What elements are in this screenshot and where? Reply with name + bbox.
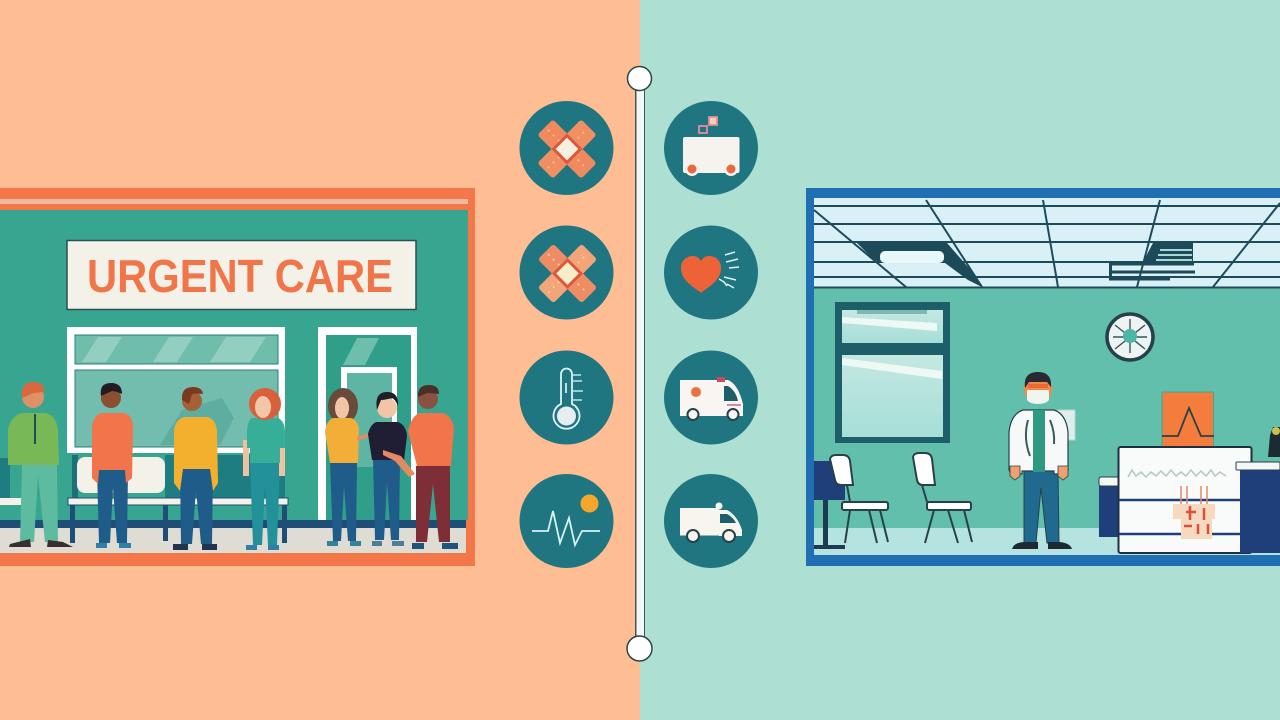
reception monitor	[1162, 392, 1214, 448]
storefront window	[67, 327, 285, 453]
sign: urgent care: URGENT CARE	[87, 250, 393, 302]
icon: supply cart	[664, 101, 758, 195]
divider timeline	[627, 66, 652, 661]
sign: urgent care	[67, 240, 416, 310]
panel: urgent care storefront	[0, 188, 475, 566]
entrance door	[318, 327, 417, 520]
icon: thermometer	[520, 350, 614, 444]
wall window	[835, 302, 950, 443]
person: yellow top with brown hair	[325, 388, 376, 546]
icon: bandage one	[520, 101, 614, 195]
person: black top	[368, 392, 415, 546]
person: orange shirt with maroon trousers	[408, 385, 458, 549]
panel: hospital interior	[806, 188, 1280, 566]
wall clock	[1107, 314, 1153, 360]
icon: pulse line	[520, 474, 614, 568]
icon: ambulance with logo	[664, 350, 758, 444]
icon: bandage two	[520, 226, 614, 320]
person: teal top with red hair	[243, 388, 285, 550]
icon: heart with sound lines	[664, 226, 758, 320]
reception desk	[1099, 427, 1280, 553]
icon: ambulance	[664, 474, 758, 568]
supply box on desk	[1173, 486, 1215, 539]
person: yellow sweater	[173, 387, 218, 550]
person: orange sweater	[92, 383, 133, 548]
waiting chairs	[814, 453, 972, 549]
doctor	[1009, 372, 1075, 549]
ceiling tiles and lights	[814, 198, 1280, 288]
person: green hoodie	[8, 382, 73, 547]
waiting benches	[0, 455, 288, 543]
